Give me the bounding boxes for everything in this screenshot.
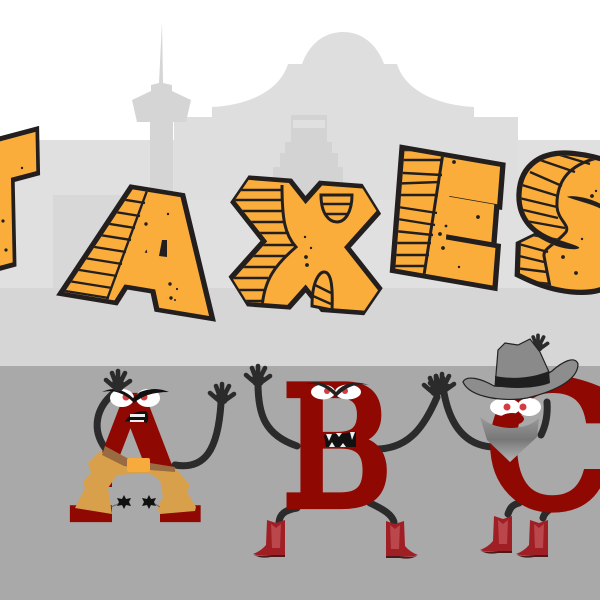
mouth xyxy=(324,432,356,447)
boot left xyxy=(480,516,512,554)
character: letter B xyxy=(246,354,437,559)
letter A: A xyxy=(74,166,219,336)
eyes xyxy=(102,389,169,407)
arms xyxy=(97,392,221,466)
red letter A: A xyxy=(74,365,197,558)
nose xyxy=(500,413,524,425)
boot right xyxy=(386,521,418,559)
hand left xyxy=(106,371,130,392)
boot right xyxy=(516,520,548,558)
arms and legs xyxy=(258,383,437,522)
title: TAXES xyxy=(0,126,600,322)
cowboy hat xyxy=(463,335,578,399)
arms and legs xyxy=(444,393,549,518)
eyes xyxy=(490,398,541,416)
bandana xyxy=(480,417,539,462)
hand left xyxy=(246,366,270,386)
skyline background xyxy=(0,22,600,366)
letter E: E xyxy=(389,132,504,310)
red letter B: B xyxy=(282,354,392,545)
hand right xyxy=(210,384,234,404)
character: letter C xyxy=(424,335,600,558)
bullet holes xyxy=(111,495,160,509)
pants xyxy=(75,451,196,514)
letter E: E xyxy=(389,132,504,310)
letter A: A xyxy=(74,166,219,336)
boot left xyxy=(253,520,285,558)
A counter xyxy=(159,240,167,257)
buckle xyxy=(127,458,150,472)
character: letter A xyxy=(74,365,234,558)
letter X: X xyxy=(244,168,367,328)
gap between the legs xyxy=(112,472,170,524)
belt xyxy=(102,446,175,472)
ground xyxy=(0,366,600,600)
mouth xyxy=(125,411,148,423)
letter X: X xyxy=(244,168,367,328)
eyes xyxy=(306,382,369,400)
hand high five xyxy=(424,374,454,396)
